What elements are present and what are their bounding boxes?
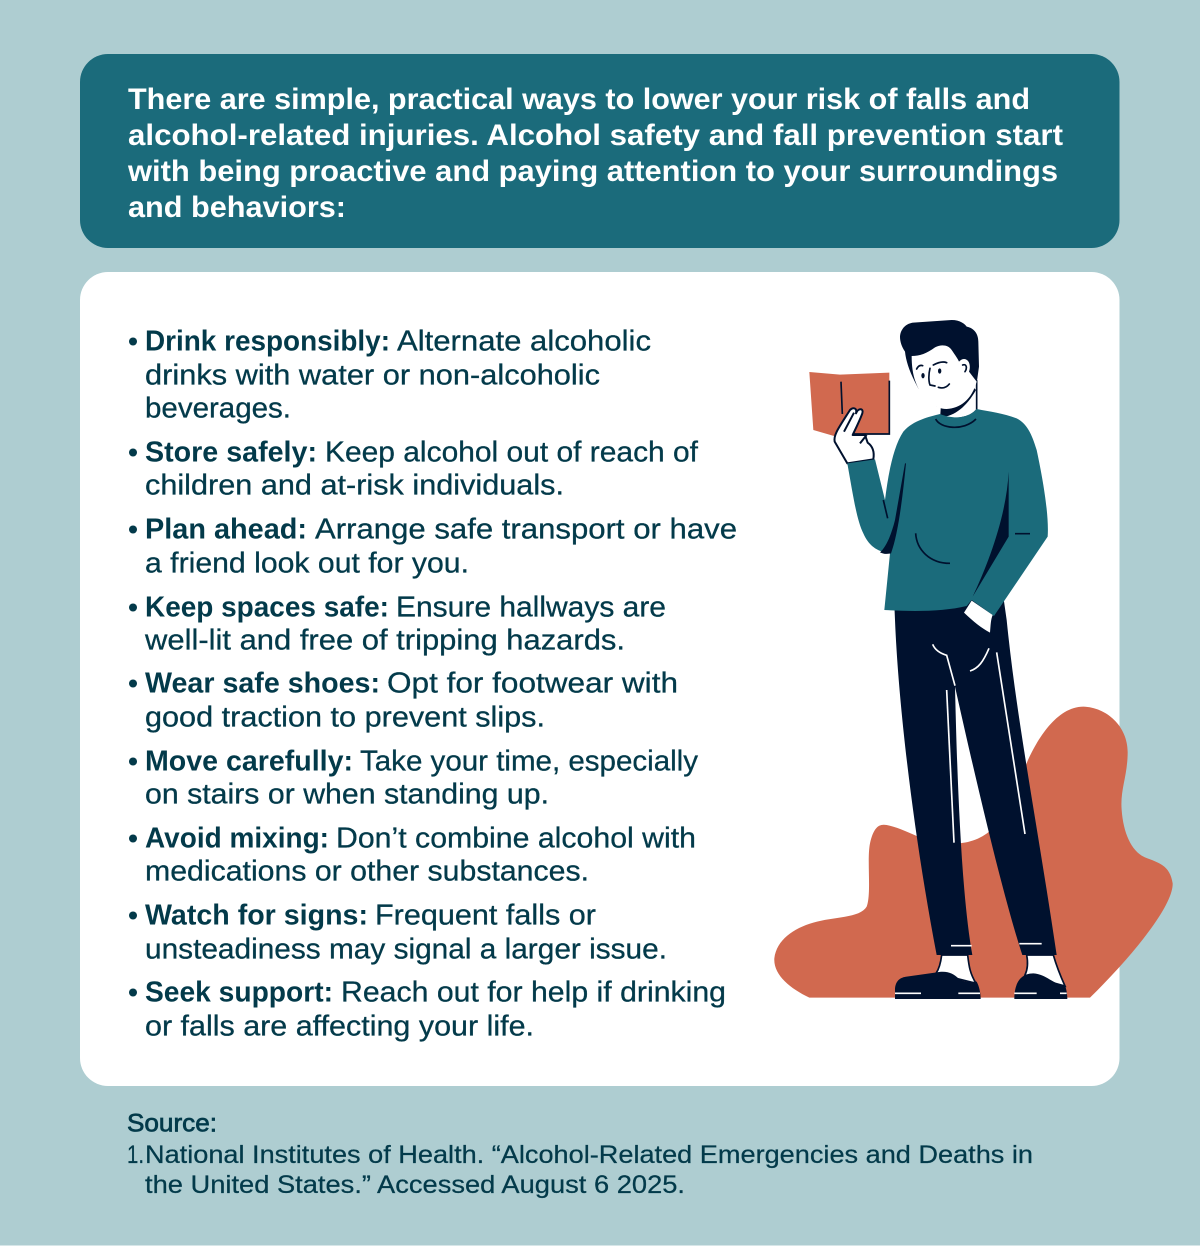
tip: drink responsibly: Alternate alcoholic [397,326,651,358]
sweater [847,409,1048,616]
header panel [80,54,1120,248]
source citation [127,1110,1033,1199]
tip: drink responsibly: drinks with water or non-alcoholic [145,360,600,392]
trousers and shoes [894,597,1067,999]
hair [900,320,979,407]
tip: keep spaces safe [129,592,666,656]
tip: plan ahead: Arrange safe transport or have [315,514,737,546]
upper body [809,320,1048,633]
list of safety tips [129,326,737,1042]
header panel: with being proactive and paying attention to your surroundings [127,155,1058,188]
tip: wear safe shoes: good traction to prevent slips. [145,702,545,734]
header panel: and behaviors: [128,191,346,224]
tip: avoid mixing [129,822,696,888]
book [809,372,889,436]
hand holding book [834,408,874,463]
tip: keep spaces safe: Ensure hallways are [396,592,666,624]
tip: move carefully: on stairs or when standing up. [145,778,549,810]
tip: seek support [129,976,726,1042]
tip: avoid mixing: Avoid mixing: [145,822,329,854]
tip: plan ahead: Plan ahead: [145,514,307,546]
tip: wear safe shoes: Wear safe shoes: [145,668,380,700]
tip: plan ahead: a friend look out for you. [145,548,469,580]
tip: move carefully [129,746,699,810]
tip: seek support: Seek support: [145,976,333,1008]
tip: watch for signs: Frequent falls or [375,900,596,932]
illustration: man reading a book [809,320,1067,999]
illustration: orange blob [774,707,1173,998]
tip: drink responsibly: Drink responsibly: [145,326,390,358]
tip: store safely: Store safely: [145,436,317,468]
tip: avoid mixing: medications or other substances. [145,856,589,888]
tip: move carefully: Take your time, especially [360,746,699,778]
tip: seek support: or falls are affecting your life. [145,1010,534,1042]
tip: drink responsibly [129,326,651,424]
source citation: 1. [127,1141,144,1169]
tip: wear safe shoes [129,668,678,734]
tip: wear safe shoes: Opt for footwear with [387,668,678,700]
tip: store safely [129,436,699,502]
tip: drink responsibly: beverages. [145,392,291,424]
tip: store safely: Keep alcohol out of reach of [325,436,699,468]
tip: store safely: children and at-risk individuals. [145,470,564,502]
face [912,345,977,409]
header panel: alcohol-related injuries. Alcohol safety and fall prevention start [128,119,1063,152]
source citation: the United States.” Accessed August 6 2025. [145,1171,685,1199]
source citation: Source: [127,1110,217,1138]
tip: watch for signs: Watch for signs: [145,900,368,932]
tip: keep spaces safe: Keep spaces safe: [145,592,389,624]
source citation: National Institutes of Health. “Alcohol-Related Emergencies and Deaths in [145,1141,1033,1169]
tip: avoid mixing: Don’t combine alcohol with [336,822,696,854]
tip: seek support: Reach out for help if drinking [341,976,726,1008]
tip: plan ahead [129,514,737,580]
neck [941,382,977,419]
header panel: There are simple, practical ways to lower your risk of falls and [128,83,1030,116]
panel: white card [80,272,1120,1086]
tip: watch for signs [129,900,667,966]
tip: move carefully: Move carefully: [145,746,353,778]
hand in pocket [964,601,993,633]
tip: keep spaces safe: well-lit and free of tripping hazards. [144,624,625,656]
tip: watch for signs: unsteadiness may signal a larger issue. [145,934,667,966]
